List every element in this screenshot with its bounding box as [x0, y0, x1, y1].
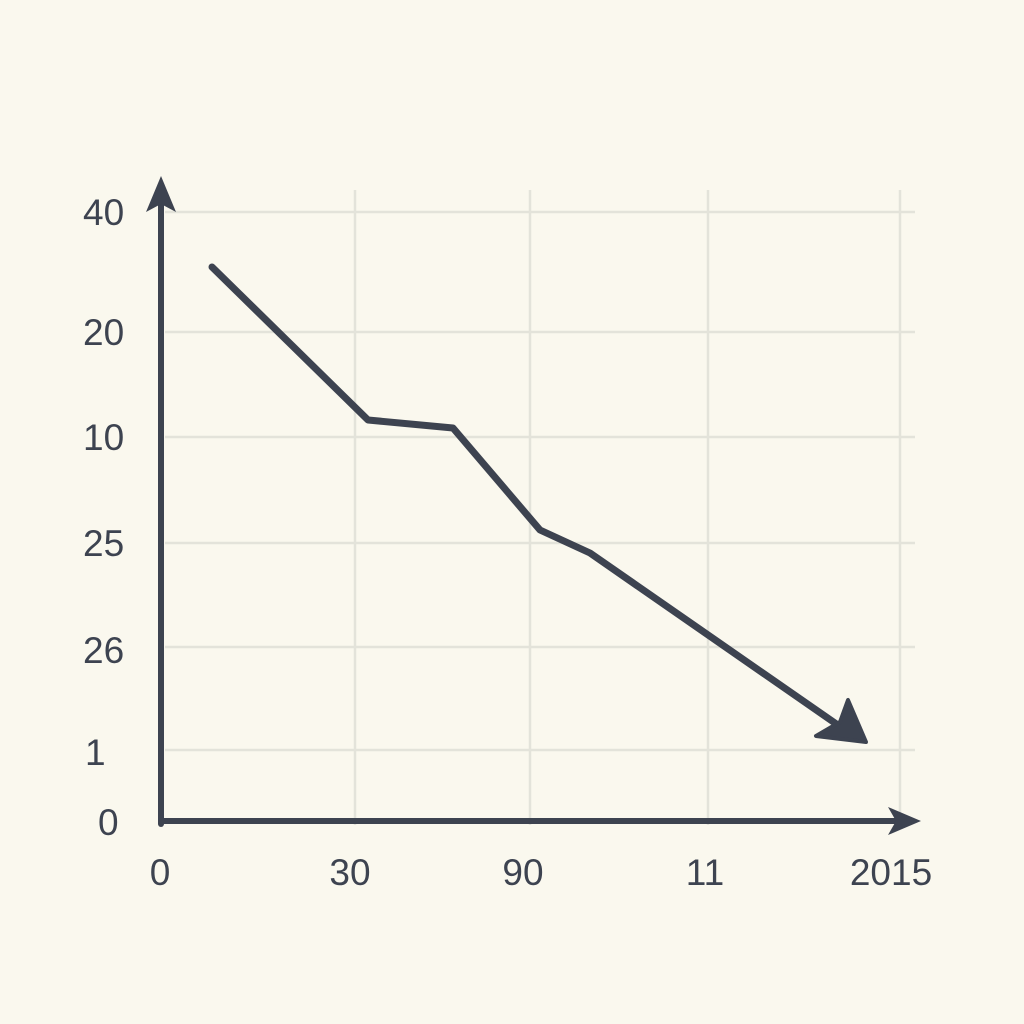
y axis labels: 0	[98, 802, 119, 843]
y axis labels	[83, 192, 124, 843]
y axis labels: 26	[83, 630, 124, 671]
x axis labels: 0	[150, 852, 170, 893]
y axis labels: 20	[83, 312, 124, 353]
x axis labels	[150, 852, 932, 893]
x axis labels: 90	[502, 852, 544, 893]
x axis labels: 2015	[850, 852, 932, 893]
x axis labels: 30	[329, 852, 371, 893]
y axis	[146, 176, 176, 824]
y axis labels: 25	[83, 523, 124, 564]
trend line with arrow	[212, 267, 866, 742]
y axis labels: 1	[85, 732, 106, 773]
x axis labels: 11	[686, 852, 724, 893]
x axis	[161, 807, 921, 835]
y axis labels: 10	[83, 417, 124, 458]
y axis labels: 40	[83, 192, 124, 233]
